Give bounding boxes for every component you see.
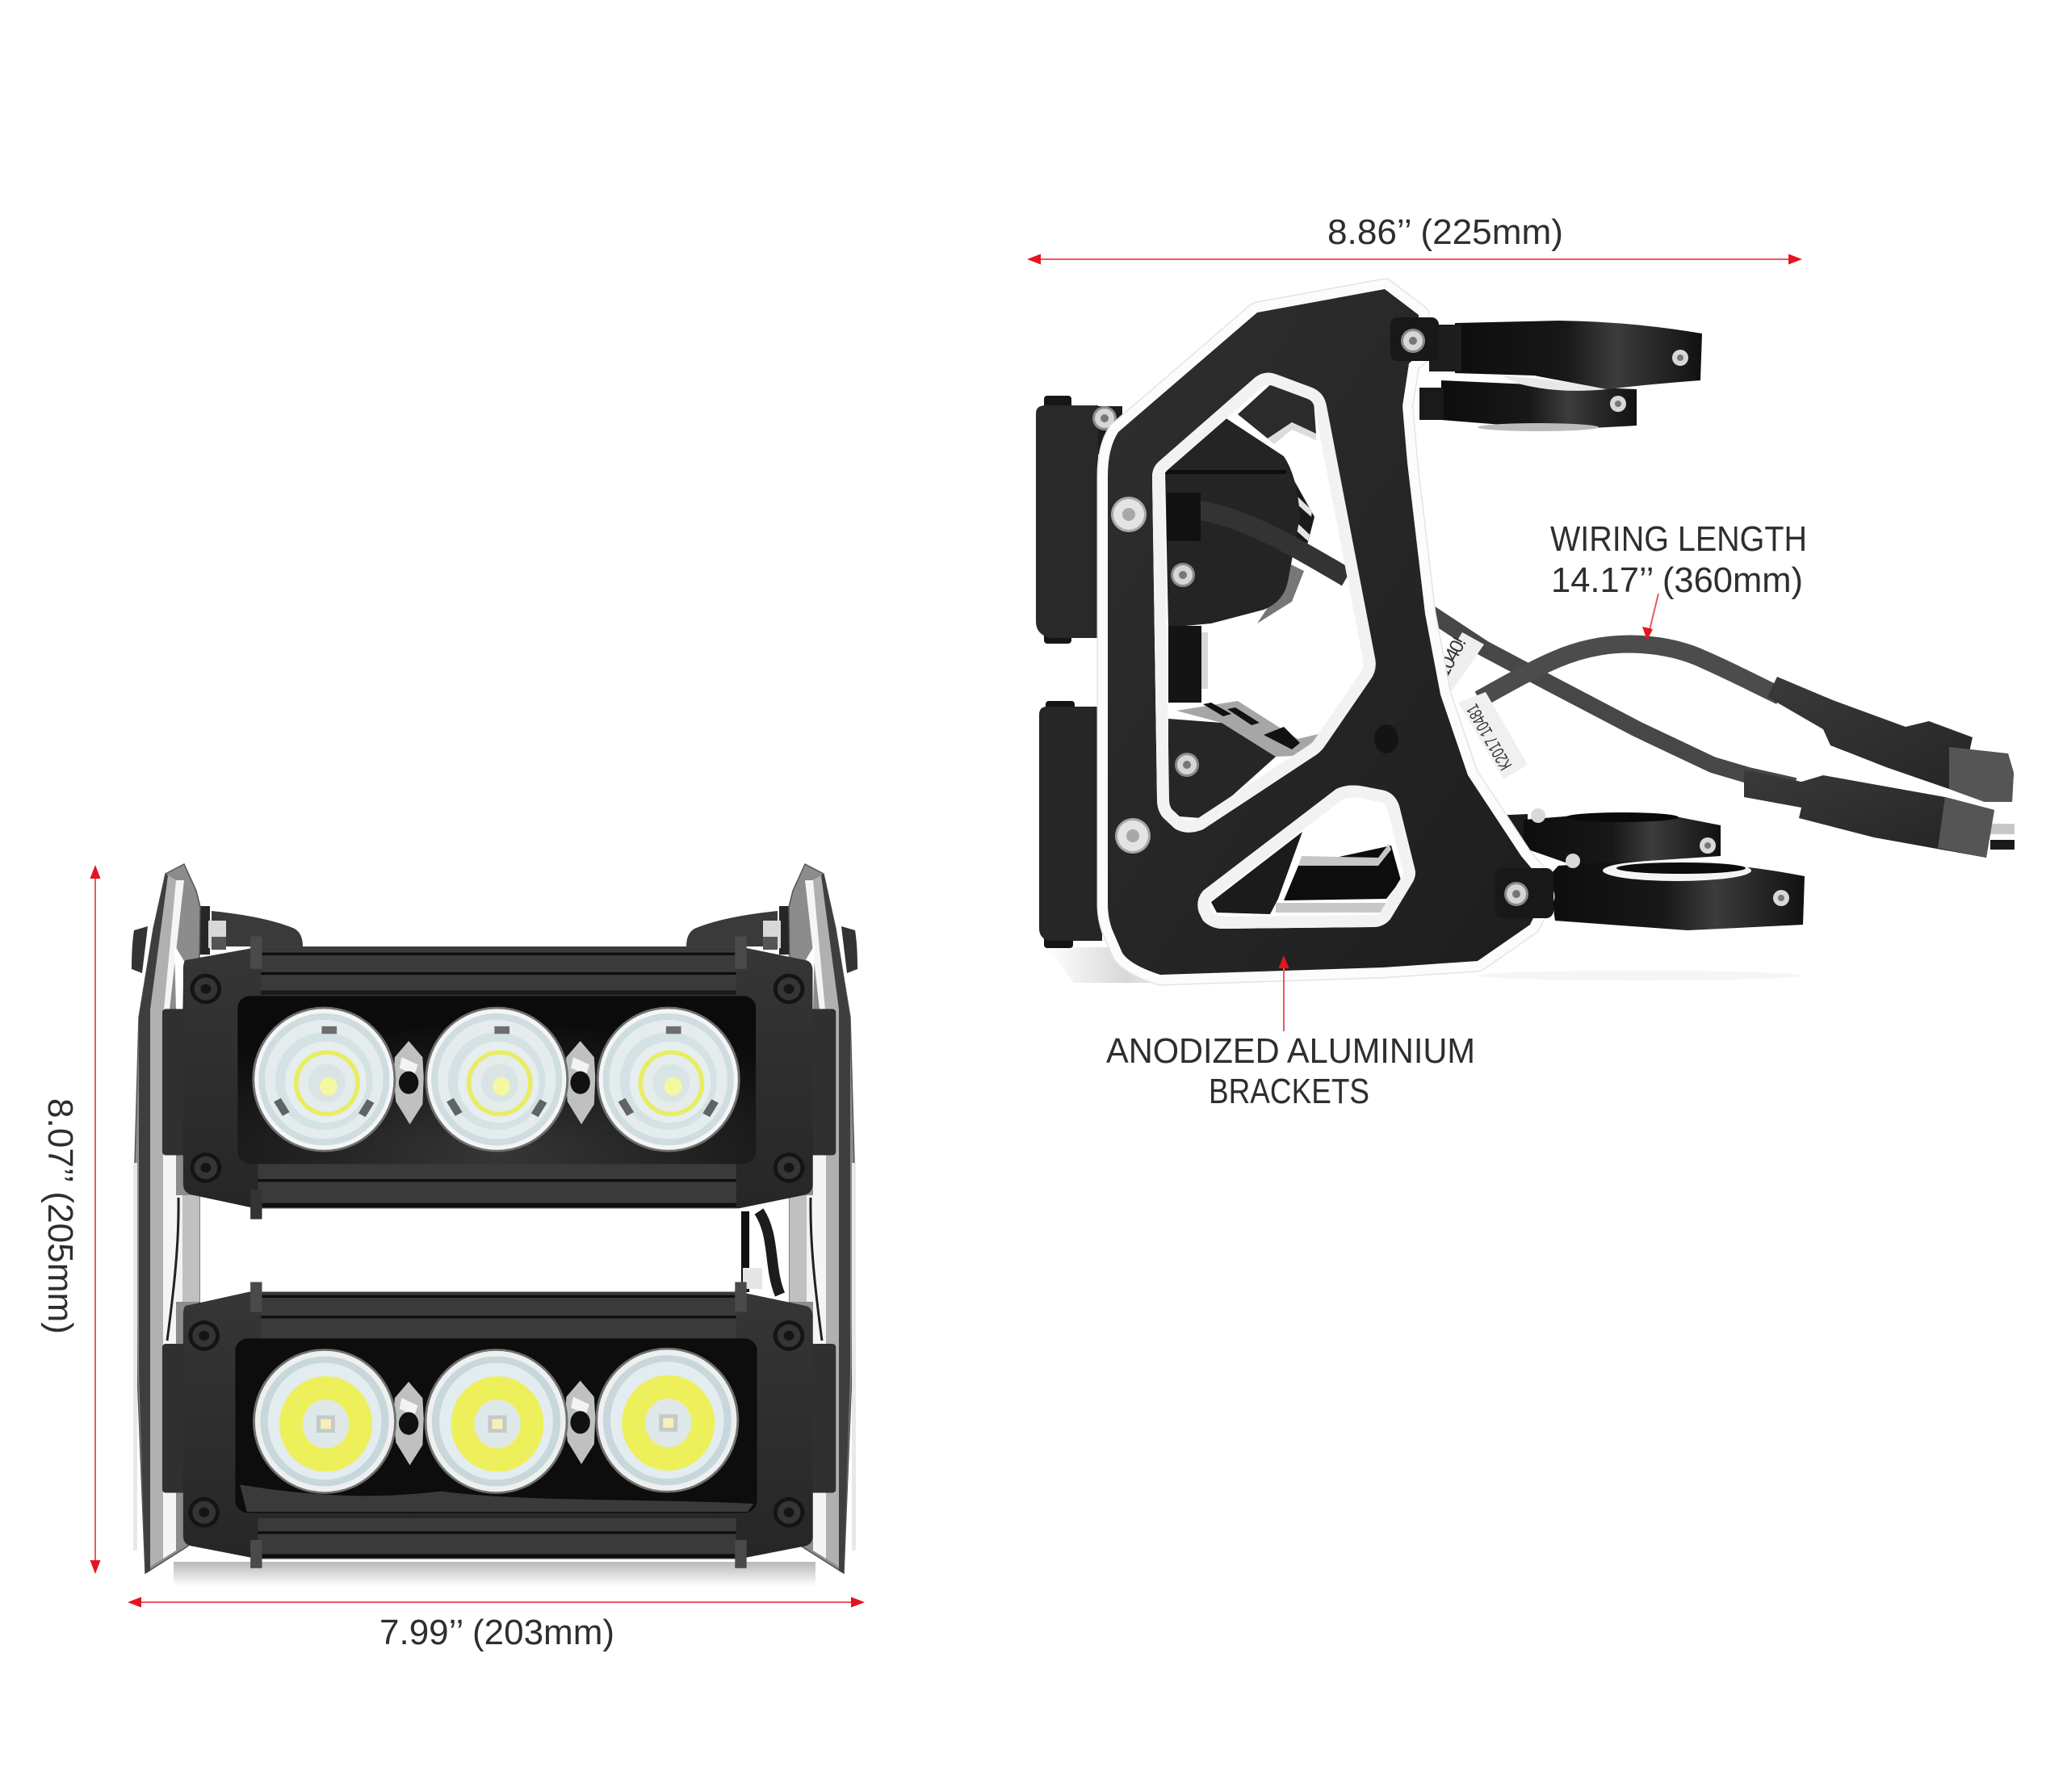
callout: anodized aluminium brackets: ANODIZED ALUMINIUM (1106, 1031, 1475, 1071)
callout: anodized aluminium brackets (1106, 1031, 1475, 1111)
upper wedge (1238, 382, 1316, 439)
rear lamp seen through the bracket (1165, 382, 1401, 914)
heat sink fins (1257, 476, 1314, 623)
lower fins (1176, 701, 1332, 757)
upper cable (1479, 644, 1780, 699)
access hole (1374, 724, 1398, 753)
cable (1199, 510, 1347, 577)
cable tag B (1458, 692, 1528, 779)
shadow under bracket (1047, 947, 1801, 983)
side mount tabs (162, 1009, 191, 1156)
clamp hinge (1492, 814, 1528, 864)
upper lamp front (1036, 396, 1122, 644)
ground shadow (174, 1562, 815, 1586)
top rib (261, 1292, 736, 1338)
window (235, 1338, 757, 1513)
bottom corner block (1495, 868, 1553, 918)
post (1168, 626, 1201, 703)
lower lamp front (1039, 701, 1102, 948)
arrow: wiring length (1642, 594, 1658, 640)
window (237, 996, 756, 1164)
dimension: depth label: 8.86’’ (225mm) (1327, 212, 1563, 252)
lower window bracket parts (1211, 832, 1302, 914)
left lamp fronts (1036, 396, 1122, 948)
aluminium bracket plate (1108, 289, 1553, 975)
callout: anodized aluminium brackets: BRACKETS (1209, 1072, 1369, 1111)
side view bracket assembly (1036, 289, 2015, 983)
screws (190, 974, 221, 1004)
bottom rib (258, 1518, 736, 1559)
lenses (253, 1349, 396, 1494)
bottom rib (258, 1164, 736, 1208)
top clamp (1455, 321, 1702, 391)
front view light assembly (132, 864, 857, 1586)
window rim upper (1152, 373, 1376, 833)
wiring harness (1413, 602, 2015, 858)
left side plate (133, 864, 200, 1573)
light bars (162, 936, 836, 1568)
front lower clamp (1549, 854, 1805, 930)
lower connector (1744, 770, 1994, 858)
dimension: width arrow (128, 1597, 865, 1607)
cable tag B: K2017 10481 (1462, 701, 1516, 774)
arrow: anodized brackets (1279, 955, 1289, 1031)
connector pins (1990, 824, 2015, 850)
cable tag A (1432, 632, 1484, 692)
housing (183, 946, 812, 1208)
connectors (393, 1382, 424, 1465)
callout: wiring length (1550, 519, 1807, 600)
bottom light bar (162, 1282, 836, 1568)
dimension: depth arrow (1027, 254, 1802, 265)
housing (183, 1292, 812, 1559)
lamp body (1165, 418, 1300, 627)
mounting bolts (1111, 497, 1147, 532)
lower body (1168, 719, 1276, 818)
top light bar (162, 936, 836, 1219)
right side plate (789, 864, 856, 1573)
dimension: height label: 8.07’’ (205mm) (40, 1098, 80, 1334)
rear lower clamp (1524, 808, 1721, 866)
lenses (252, 1007, 396, 1152)
callout: wiring length: WIRING LENGTH (1550, 519, 1807, 559)
screws (188, 1320, 220, 1351)
lower-position upper clamp (1441, 380, 1637, 431)
top rib (261, 946, 736, 996)
upper clamps (1419, 321, 1702, 431)
upper connector (1767, 677, 2014, 802)
dimension: width label: 7.99’’ (203mm) (379, 1613, 614, 1652)
window rim lower (1197, 786, 1415, 929)
side mount tabs (162, 1344, 191, 1493)
connectors (393, 1041, 424, 1124)
top corner block (1390, 317, 1439, 361)
wiring between lamps (741, 1211, 780, 1295)
callout: wiring length: 14.17’’ (360mm) (1551, 560, 1803, 600)
cable tag A: 1040! (1432, 633, 1471, 681)
lower cable (1413, 602, 1795, 786)
clamps behind front view (132, 906, 857, 973)
lower clamps (1492, 808, 1805, 930)
dimension: height arrow (90, 865, 100, 1574)
